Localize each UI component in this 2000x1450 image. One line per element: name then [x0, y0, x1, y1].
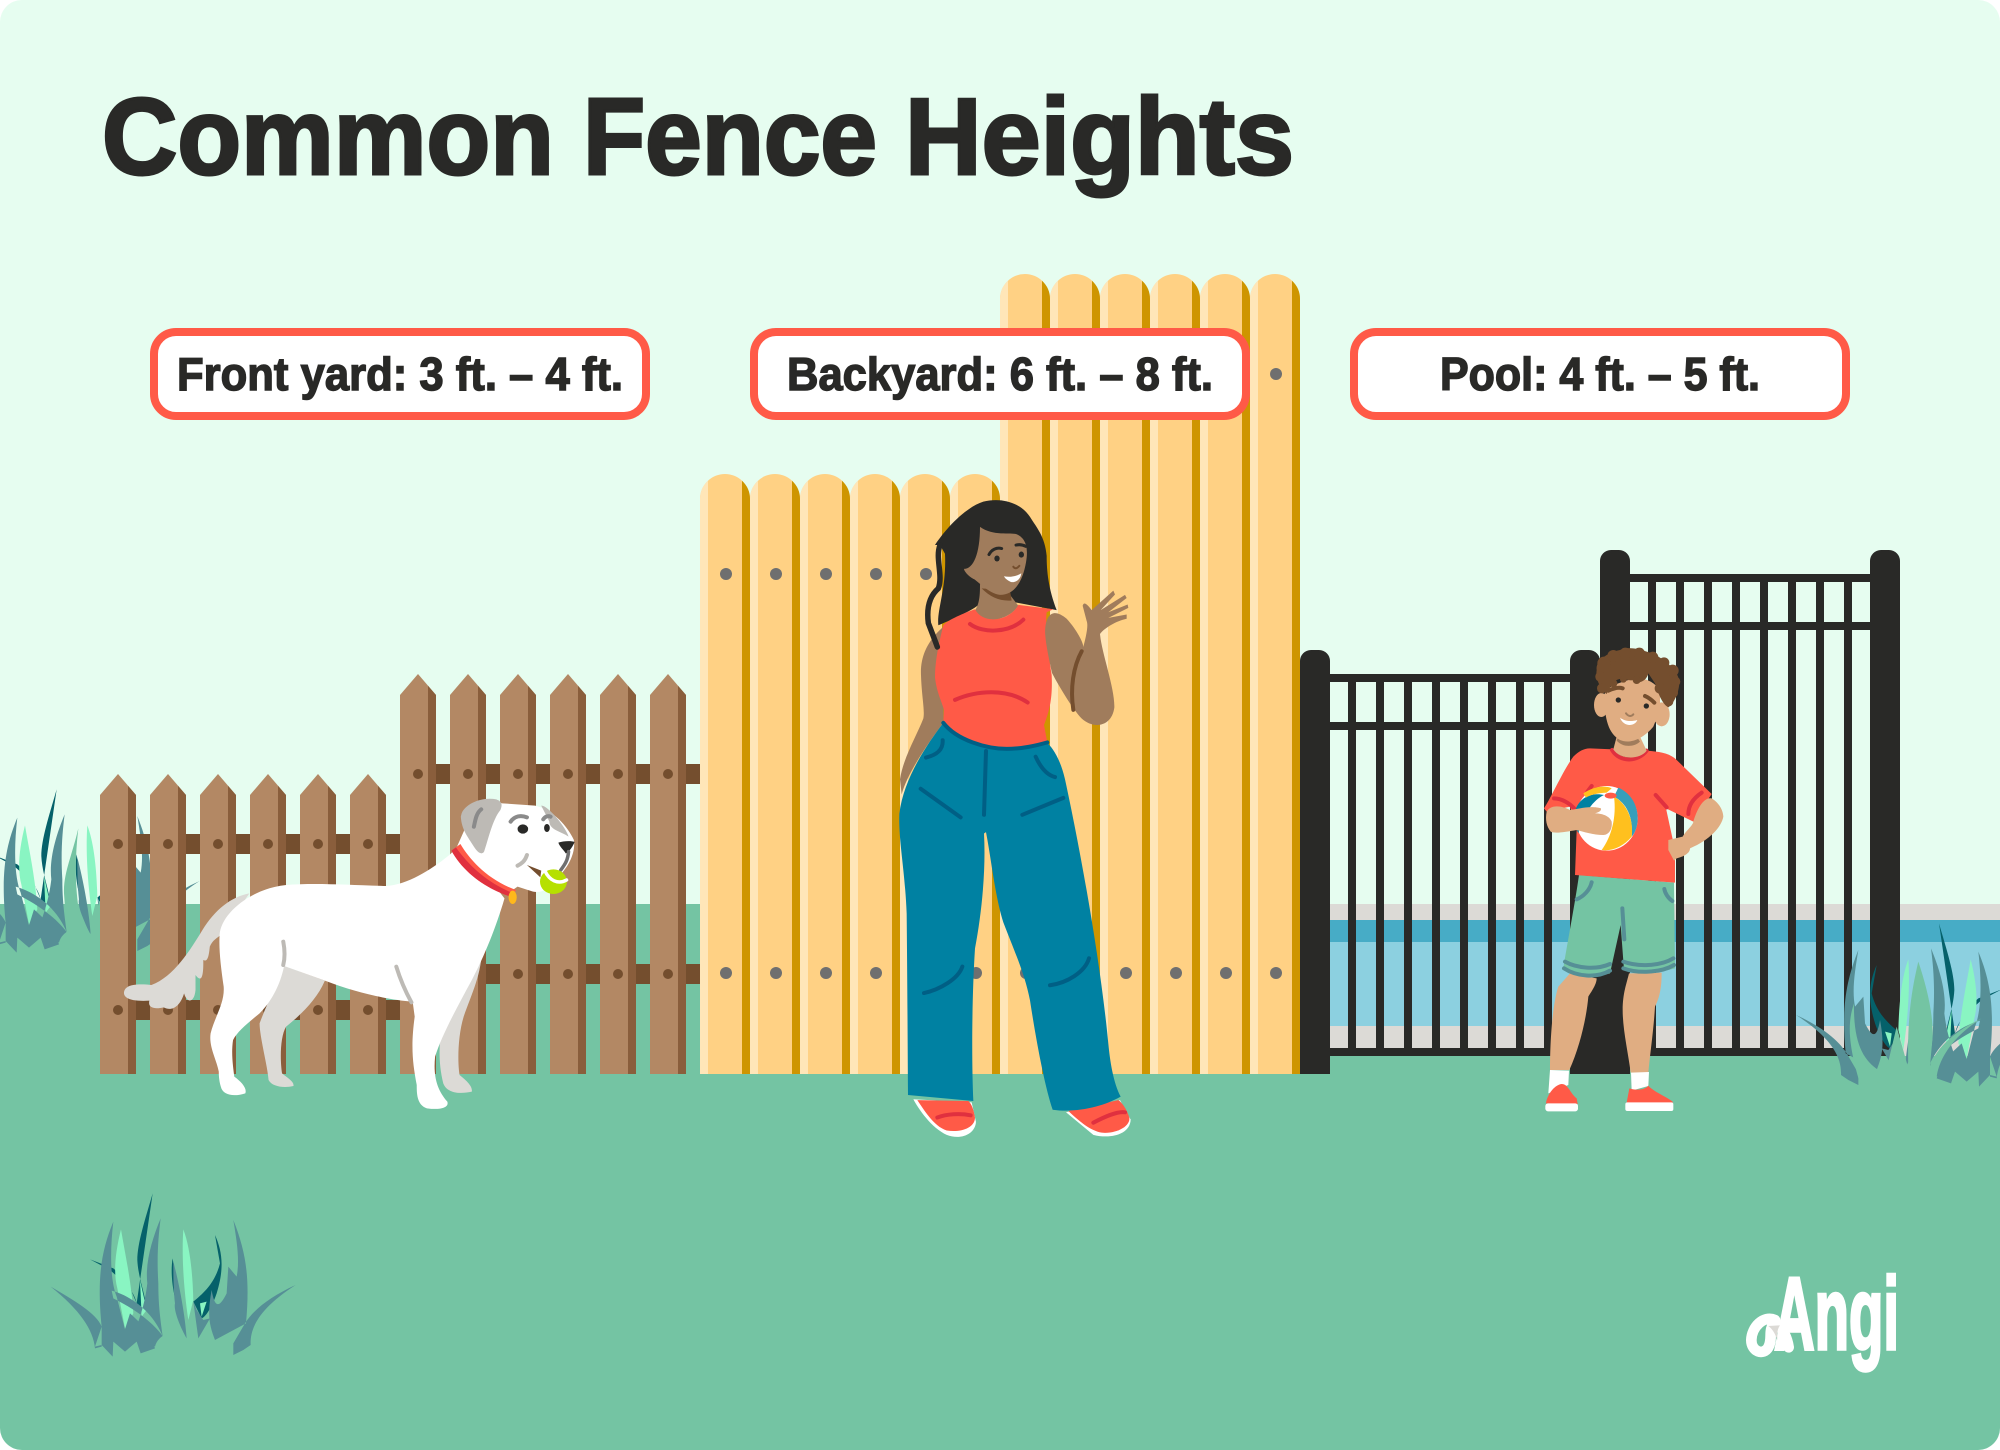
- boy with beach ball: [1544, 648, 1723, 1111]
- woman waving: [899, 500, 1131, 1137]
- dog face: [511, 816, 575, 877]
- label: pool: [1354, 332, 1846, 416]
- pool: [1330, 904, 2000, 1056]
- dog collar: [451, 844, 517, 904]
- dog far legs: [260, 947, 482, 1093]
- woman hair back: [935, 500, 1057, 625]
- label: pool: Pool: 4 ft. – 5 ft.: [1440, 348, 1760, 400]
- icon: grass tuft right: [1796, 923, 2000, 1087]
- boy socks and shoes: [1545, 1070, 1673, 1111]
- logo: Angi: [1751, 1256, 1899, 1371]
- title: [104, 94, 1292, 198]
- title: Heights: [905, 76, 1294, 198]
- woman raised arm: [1045, 591, 1128, 725]
- woman hair strand: [928, 545, 940, 647]
- dog body: [210, 843, 504, 1109]
- boy arms: [1546, 798, 1723, 861]
- title: Common: [102, 76, 554, 198]
- dog tail: [124, 893, 249, 1009]
- picket fence: front yard: [100, 674, 700, 1074]
- dog leg creases: [283, 942, 411, 1002]
- boy head: [1594, 679, 1670, 758]
- dog with tennis ball: [124, 799, 575, 1109]
- woman face: [964, 527, 1027, 595]
- woman top: [935, 605, 1053, 749]
- woman neck: [976, 584, 1018, 620]
- title: Fence: [583, 76, 877, 198]
- plank fence: backyard: [700, 274, 1300, 1074]
- label: front yard: [154, 332, 646, 416]
- dog ears: [461, 799, 569, 853]
- lawn: [0, 904, 2000, 1450]
- icon: grass tuft left behind fence: [0, 789, 200, 960]
- tennis ball: [540, 869, 567, 894]
- woman shoes: [913, 1099, 1131, 1137]
- boy shirt: [1544, 748, 1712, 883]
- woman jeans: [899, 723, 1121, 1111]
- woman left arm: [900, 625, 945, 794]
- dog head: [456, 803, 574, 892]
- metal pool fence: [1300, 550, 1900, 1074]
- icon: grass tuft foreground: [51, 1193, 296, 1357]
- boy legs: [1550, 973, 1662, 1073]
- boy curly hair: [1595, 648, 1680, 707]
- beach ball: [1575, 786, 1638, 851]
- label: front yard: Front yard: 3 ft. – 4 ft.: [177, 348, 623, 400]
- boy shorts: [1563, 875, 1675, 976]
- label: backyard: Backyard: 6 ft. – 8 ft.: [787, 348, 1213, 400]
- label: backyard: [754, 332, 1246, 416]
- logo: Angi: Angi: [1774, 1256, 1899, 1371]
